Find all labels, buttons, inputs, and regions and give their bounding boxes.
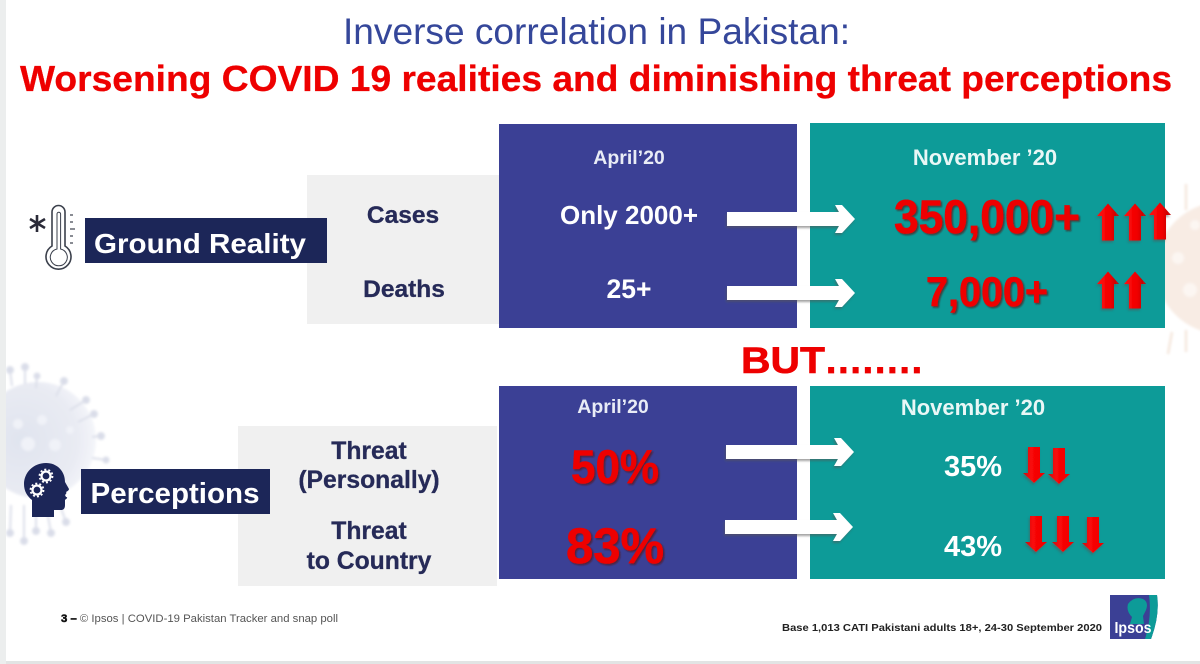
heading: ground reality: Ground Reality (94, 228, 306, 259)
value: threat personally November: 35% (944, 451, 1002, 483)
panel: perceptions November (810, 386, 1165, 579)
icon: up arrows deaths (1097, 272, 1146, 308)
title line 2: Worsening COVID 19 realities and diminishing threat perceptions (20, 58, 1172, 99)
arrow: deaths (727, 279, 855, 307)
label: threat personally: Threat (331, 438, 407, 465)
decorative virus: right (1156, 184, 1200, 354)
icon: down arrows country (1025, 516, 1104, 553)
panel: ground reality April (499, 124, 797, 328)
left page edge (0, 0, 6, 664)
value: threat to country April: 83% (566, 518, 664, 574)
value: cases November: 350,000+ (894, 190, 1080, 243)
BUT callout: ........ (826, 340, 922, 381)
value: cases April: Only 2000+ (560, 200, 698, 230)
icon: up arrows cases (1097, 202, 1171, 240)
BUT callout: BUT (741, 340, 825, 381)
arrow: threat to country (725, 513, 853, 541)
column heading: April’20 (593, 147, 665, 169)
logo: Ipsos: Ipsos (1114, 620, 1152, 637)
footer: source note: 3 – © Ipsos | COVID-19 Pakistan Tracker and snap poll (61, 613, 338, 625)
label: cases: Cases (367, 202, 439, 229)
panel: ground reality November (810, 123, 1165, 328)
panel: perceptions April (499, 386, 797, 579)
panel: perceptions row labels (238, 426, 497, 586)
panel: perceptions row labels: (Personally) (298, 467, 440, 494)
column heading: November ’20 (913, 145, 1057, 170)
arrow: threat personally (726, 438, 854, 466)
column heading: April’20 (577, 396, 649, 418)
title line 1: Inverse correlation in Pakistan: (343, 11, 850, 52)
value: deaths November: 7,000+ (926, 268, 1048, 315)
value: threat to country November: 43% (944, 531, 1002, 563)
column heading: November ’20 (901, 395, 1045, 420)
icon: down arrows personally (1023, 447, 1070, 484)
panel: perceptions row labels: to Country (307, 548, 432, 575)
panel: ground reality row labels (307, 175, 499, 324)
heading: ground reality (85, 218, 327, 263)
arrow: cases (727, 205, 855, 233)
value: threat personally April: 50% (571, 440, 659, 493)
logo: Ipsos (1110, 595, 1158, 639)
heading: perceptions: Perceptions (90, 478, 260, 510)
value: deaths April: 25+ (607, 274, 651, 304)
label: deaths: Deaths (363, 276, 445, 303)
label: threat to country: Threat (331, 518, 407, 545)
heading: perceptions (81, 469, 270, 514)
footer: base note: Base 1,013 CATI Pakistani adults 18+, 24-30 September 2020 (782, 622, 1102, 634)
decorative virus: left (0, 364, 108, 544)
icon: head with gears (24, 463, 69, 517)
BUT callout (741, 340, 922, 381)
icon: thermometer with snowflake (30, 206, 75, 269)
title (20, 11, 1172, 99)
